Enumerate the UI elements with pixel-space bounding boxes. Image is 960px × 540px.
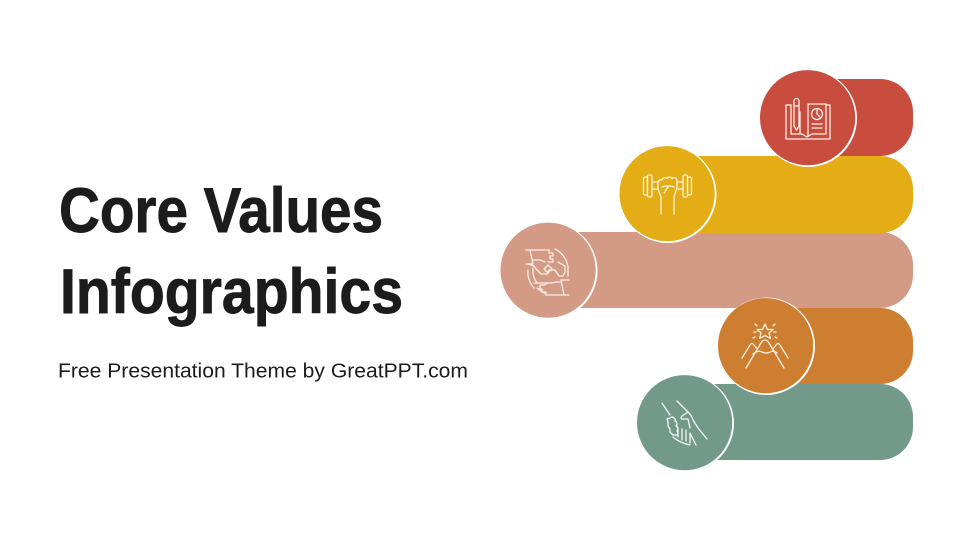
icon: mountain with star [742,324,788,368]
title [59,176,403,327]
circle: orange [718,298,815,395]
bar: orange [790,308,913,384]
title: Infographics [60,257,403,327]
circle: red [760,70,857,167]
circle: pink [500,222,598,320]
subtitle: Free Presentation Theme by GreatPPT.com [58,360,468,382]
icon: open book with pencil and chart [786,98,830,139]
bar: yellow [680,156,913,233]
bar: pink [560,232,913,308]
title: Core Values [59,176,383,246]
bar: red [820,79,913,156]
circle: yellow [619,146,716,243]
circle: green [637,375,734,472]
icon: helping hands [662,401,707,445]
bar: green [700,384,913,460]
icon: interlocking hands [526,249,569,295]
icon: fist with dumbbell [644,175,692,214]
